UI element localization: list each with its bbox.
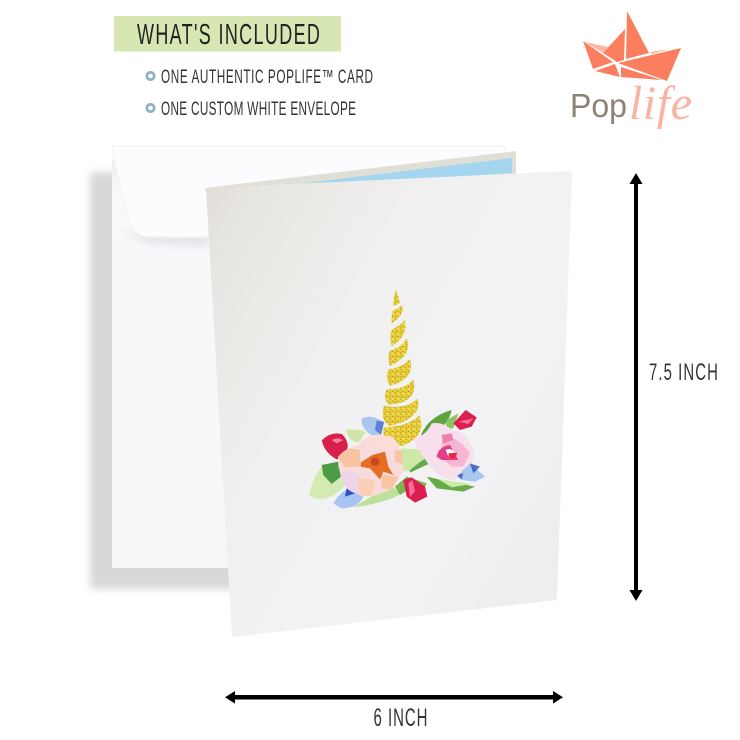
envelope: [90, 146, 505, 589]
heading banner: WHAT'S INCLUDED: [137, 19, 320, 51]
label: width: 6 INCH: [374, 704, 428, 732]
card front panel: [206, 171, 572, 637]
card inner blue: [305, 158, 512, 186]
wordmark: life: [629, 77, 692, 130]
greeting card: [205, 151, 572, 637]
card back panel: [205, 151, 516, 192]
label: height: 7.5 INCH: [649, 360, 718, 386]
arrow: height dimension: [630, 173, 642, 601]
included items list: [147, 67, 373, 120]
bullet item: card: ONE AUTHENTIC POPLIFE™ CARD: [161, 67, 373, 88]
logo: Poplife: [570, 11, 692, 130]
bullet item: envelope: ONE CUSTOM WHITE ENVELOPE: [161, 99, 356, 120]
flap shadow: [122, 232, 210, 248]
icon: origami boat: [583, 11, 681, 81]
arrow: width dimension: [225, 691, 563, 704]
envelope shadow: [90, 172, 240, 589]
unicorn horn: [383, 292, 421, 446]
envelope flap: [112, 146, 505, 237]
envelope body: [112, 160, 242, 568]
wordmark: [570, 77, 692, 130]
right flower: [395, 410, 485, 503]
illustration: unicorn horn and flowers: [309, 292, 485, 508]
left flower: [309, 417, 408, 508]
wordmark: Pop: [570, 87, 627, 124]
